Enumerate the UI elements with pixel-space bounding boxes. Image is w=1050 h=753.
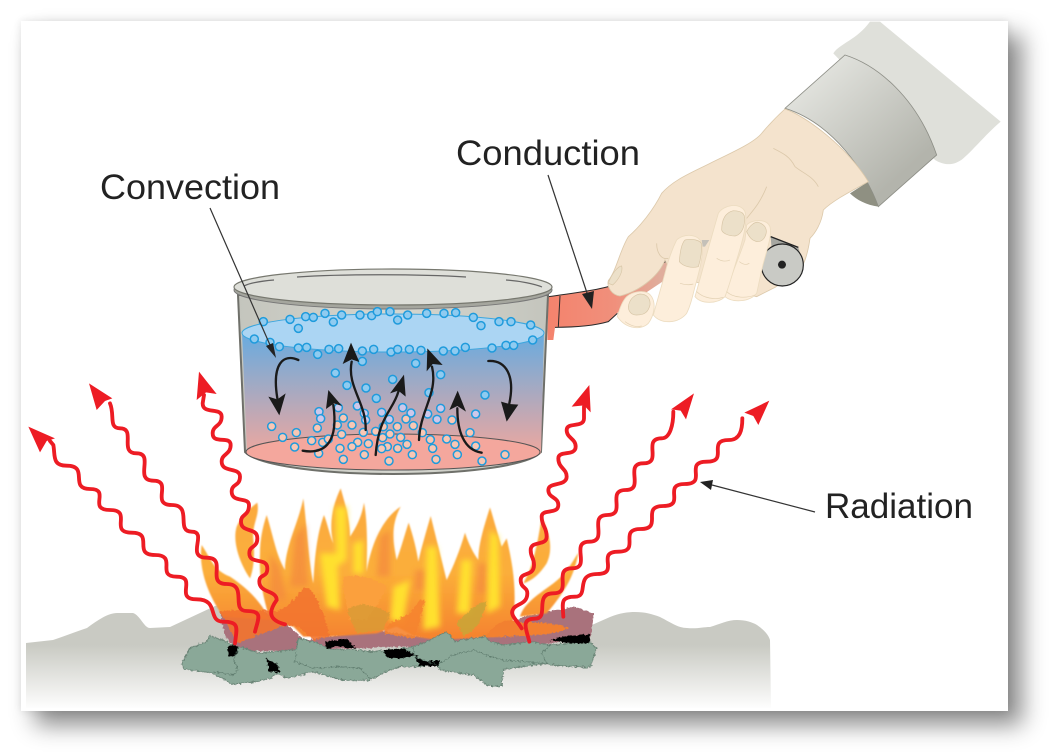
grey handle sliver <box>702 240 709 247</box>
water volume <box>242 333 544 470</box>
sleeve <box>833 22 1001 164</box>
rim highlights <box>244 275 542 287</box>
ground hills <box>26 600 771 708</box>
red radiation wave 4 <box>512 385 591 628</box>
flame orange streaks <box>270 523 487 600</box>
black charred gaps <box>227 634 589 673</box>
leader arrow: radiation <box>700 480 815 512</box>
arrow heads <box>268 343 518 422</box>
ground base fill <box>200 640 600 708</box>
bottom peach bubbles <box>268 414 509 465</box>
surface bubbles <box>250 308 537 402</box>
flame highlights <box>320 507 500 630</box>
fire: flames and coals <box>182 488 597 686</box>
pan bottom <box>246 434 540 470</box>
rising lilac bubbles <box>315 402 480 424</box>
flame darker base patches <box>220 576 568 643</box>
leader arrow: convection <box>210 208 276 358</box>
knuckle lines <box>608 148 818 281</box>
pan handle <box>547 260 680 340</box>
flames <box>201 488 578 640</box>
rock outlines <box>213 645 550 680</box>
red radiation wave 1 <box>28 427 236 643</box>
coals: grey-green rocks <box>182 632 597 686</box>
red radiation wave 3 <box>197 372 285 624</box>
sleeve, cuff, hand and pan handle <box>547 22 1001 340</box>
black convection arrows <box>276 358 511 455</box>
cuff underside <box>850 182 890 207</box>
pan body <box>238 295 548 474</box>
leader arrow: conduction <box>548 175 594 309</box>
back of hand <box>608 109 868 297</box>
bubbles and convection arrows <box>250 308 537 465</box>
cuff <box>785 55 937 207</box>
water surface <box>242 314 544 352</box>
fingers <box>617 205 771 328</box>
saucepan with water <box>234 269 552 474</box>
handle edge <box>548 260 668 327</box>
label: Convection: Convection <box>100 167 280 207</box>
red radiation wave 2 <box>89 383 258 632</box>
red radiation wave 5 <box>526 393 694 642</box>
pan rim top <box>234 269 552 305</box>
finger creases <box>625 258 755 327</box>
label: Conduction: Conduction <box>456 133 640 173</box>
pan rim <box>234 271 552 309</box>
label: Radiation: Radiation <box>825 487 973 526</box>
finger shapes <box>617 205 771 328</box>
thumb nail <box>608 266 622 285</box>
handle knob <box>761 237 803 286</box>
fingernails <box>628 211 766 315</box>
mauve embers <box>220 607 594 652</box>
red radiation wave 6 <box>563 401 769 617</box>
